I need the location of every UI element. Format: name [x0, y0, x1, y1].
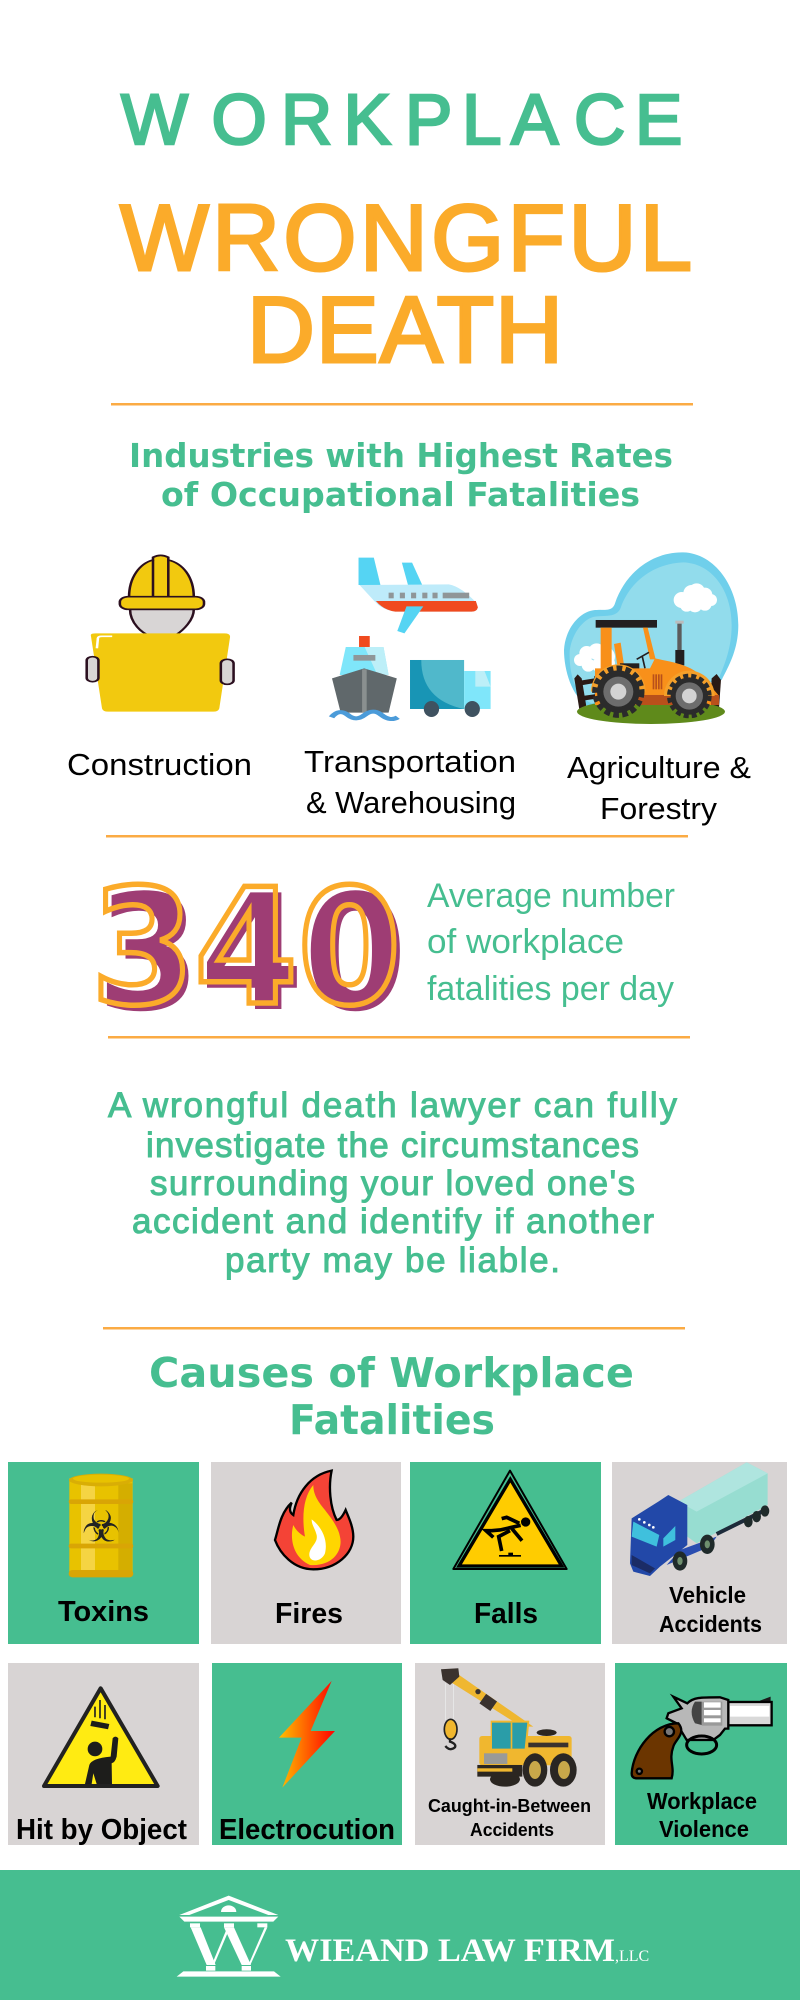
- industry labels: Construction: [67, 747, 252, 782]
- statistic description: fatalities per day: [427, 970, 674, 1008]
- card: fires: [211, 1462, 401, 1644]
- title: Wrongful Death: [120, 185, 692, 382]
- icon: barrel: [69, 1474, 133, 1577]
- statistic: 340: 340: [97, 860, 407, 1047]
- label: Vehicle: [669, 1582, 746, 1608]
- icon: semi truck: [630, 1462, 769, 1576]
- icon: falling object warning: [44, 1688, 158, 1786]
- label: Caught-in-Between: [428, 1796, 591, 1816]
- paragraph: lawyer: surrounding your loved one's: [150, 1164, 635, 1203]
- paragraph: lawyer: party may be liable.: [225, 1241, 560, 1280]
- title: Wrongful Death: DEATH: [247, 277, 563, 382]
- icon: construction worker: [87, 555, 234, 712]
- heading: industries: Industries with Highest Rates: [129, 436, 673, 475]
- heading: causes: Causes of Workplace: [149, 1349, 634, 1397]
- label: Accidents: [659, 1611, 762, 1637]
- label: Workplace: [647, 1788, 757, 1814]
- card: hit by object: [8, 1663, 199, 1846]
- label: Hit by Object: [16, 1814, 187, 1846]
- icon: revolver: [632, 1697, 772, 1778]
- card: vehicle accidents: [612, 1462, 787, 1644]
- logo: firm name: WIEAND LAW FIRM: [285, 1933, 615, 1969]
- label: Violence: [659, 1816, 749, 1842]
- label: [659, 1582, 762, 1637]
- icon: barrel: ☣: [82, 1503, 120, 1553]
- paragraph: lawyer: A wrongful death lawyer can fully: [108, 1086, 678, 1125]
- icon: crane truck: [441, 1668, 577, 1787]
- icon: fall warning: [453, 1471, 567, 1569]
- statistic description: of workplace: [427, 923, 624, 961]
- title: Wrongful Death: WRONGFUL: [120, 185, 692, 290]
- label: Electrocution: [219, 1814, 395, 1846]
- icon: tractor on a farm: [564, 552, 738, 724]
- heading: causes: Fatalities: [289, 1396, 495, 1444]
- logo: firm name: ,LLC: [615, 1948, 649, 1965]
- heading: causes: [149, 1349, 634, 1444]
- label: Falls: [474, 1598, 538, 1630]
- icon: plane, ship and truck: [332, 558, 491, 719]
- statistic: 340: 340: [91, 854, 401, 1041]
- industry labels: Agriculture &: [567, 750, 751, 785]
- logo: temple with W: [177, 1896, 281, 1977]
- heading: industries: [129, 436, 673, 514]
- heading: industries: of Occupational Fatalities: [161, 475, 640, 514]
- paragraph: lawyer: [108, 1086, 678, 1280]
- icon: lightning bolt: [279, 1681, 335, 1788]
- card: toxins: [8, 1462, 199, 1644]
- card: falls: [410, 1462, 601, 1644]
- paragraph: lawyer: investigate the circumstances: [146, 1126, 639, 1165]
- icon: flame: [275, 1471, 353, 1569]
- card: electrocution: [212, 1663, 402, 1846]
- card: caught-in-between: [415, 1663, 605, 1845]
- industry labels: [67, 744, 751, 826]
- title: Workplace: WORKPLACE: [121, 81, 682, 160]
- label: Toxins: [58, 1596, 149, 1628]
- label: [647, 1788, 757, 1842]
- statistic description: Average number: [427, 877, 675, 915]
- footer band: [0, 1870, 800, 2000]
- label: Accidents: [470, 1820, 554, 1840]
- label: Fires: [275, 1598, 343, 1630]
- label: [428, 1796, 591, 1840]
- card: workplace violence: [615, 1663, 787, 1845]
- industry labels: Transportation: [304, 744, 516, 779]
- paragraph: lawyer: accident and identify if another: [132, 1202, 654, 1241]
- statistic description: [427, 877, 675, 1008]
- industry labels: & Warehousing: [306, 785, 516, 820]
- industry labels: Forestry: [600, 791, 718, 826]
